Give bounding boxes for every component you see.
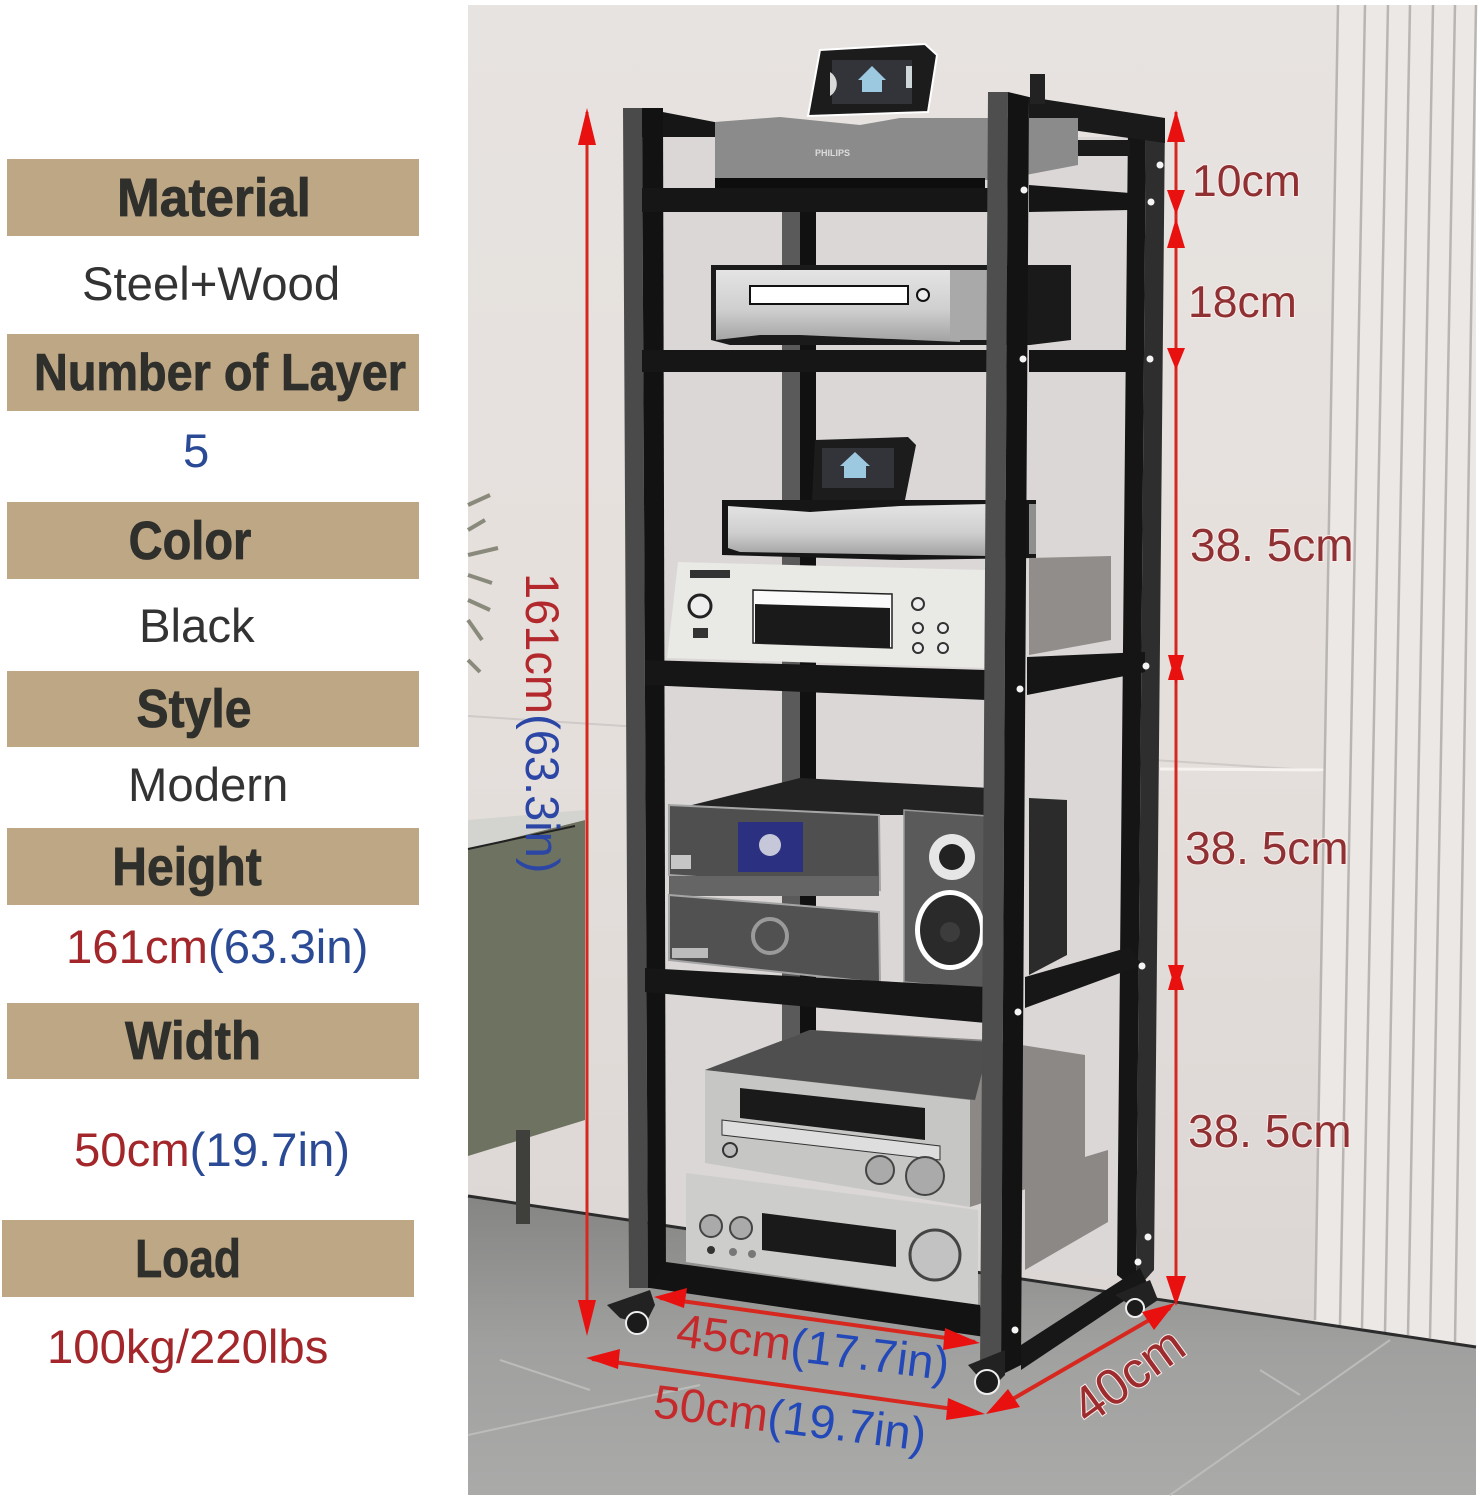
device: shelf 3 tablet and box [722,437,1036,560]
dimension labels [516,157,1354,1461]
device: top tablet [808,44,937,116]
label: 18cm: 18cm [1188,278,1297,327]
dimension arrows [587,112,1176,1412]
left post [623,108,648,1288]
rack front [607,92,1164,1394]
device: shelf 2 box [711,265,1071,345]
label: total height: 161cm (63.3in) [516,573,569,873]
device: receiver [705,1030,1085,1207]
rear right post [1117,120,1146,1290]
shelf fronts [642,188,988,212]
heading: Style [7,671,419,747]
label: 38.5cm middle: 38. 5cm [1185,822,1349,874]
heading: Material [7,159,419,236]
device: amplifiers [669,805,880,983]
device: shelf 1 box: PHILIPS [815,148,850,158]
device: bottom amplifier [686,1150,1108,1305]
bolts [1012,162,1164,1334]
heading: Height: Height [112,836,261,896]
heading: Material: Material [117,168,310,228]
green cabinet [468,820,585,1156]
heading: Width: Width [124,1011,261,1071]
top rails [642,108,730,137]
right front post [980,92,1008,1375]
rack interior shadow [663,137,1128,1275]
floor [468,1196,1476,1495]
shelf 4 top surface [680,778,990,815]
heading: Style: Style [136,679,251,739]
shelf sides [1029,185,1130,212]
label: 50cm width: 50cm(19.7in) [651,1374,930,1461]
value: 5: 5 [183,425,209,478]
value: Steel+Wood: Steel+Wood [82,258,340,311]
heading: Number of Layer [7,334,419,411]
value: Black: Black [139,600,255,653]
device: shelf 1 box [715,117,1078,188]
devices [667,44,1111,1305]
value: height 161cm: 161cm(63.3in) [66,921,368,974]
plant [468,495,498,672]
heading: Number of Layer: Number of Layer [34,344,406,402]
value: width 50cm: 50cm(19.7in) [74,1124,350,1177]
label: 10cm: 10cm [1192,157,1301,206]
heading: Load: Load [135,1228,240,1288]
value: Modern: Modern [128,759,288,812]
wall slats [1315,5,1476,1347]
heading: Color: Color [128,510,251,570]
device: CD player [667,556,1111,668]
heading: Width [7,1003,419,1079]
icon: casters [607,1280,1158,1394]
heading: Load [2,1220,414,1297]
label: 38.5cm upper: 38. 5cm [1190,519,1354,571]
label: 38.5cm lower: 38. 5cm [1188,1105,1352,1157]
label: 45cm depth front: 45cm(17.7in) [674,1303,953,1390]
label: 40cm: 40cm [1061,1315,1195,1435]
panel: room photo background [468,5,1476,1495]
value: load 100kg: 100kg/220lbs [47,1321,328,1374]
icon: speaker [904,798,1067,990]
heading: Color [7,502,419,579]
panel: specification list [2,159,419,1374]
heading: Height [7,828,419,905]
rear left post [782,205,800,1105]
rack back [642,74,1165,1370]
